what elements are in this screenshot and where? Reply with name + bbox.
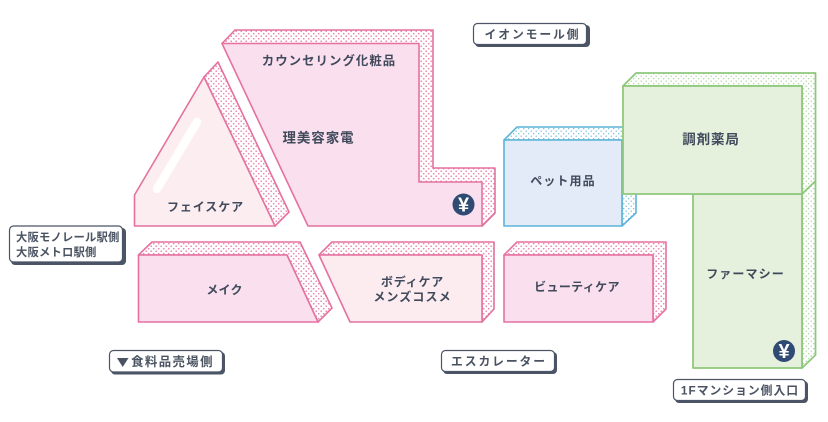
heading: ボディケア メンズコスメ: メンズコスメ [373,289,452,304]
heading: ペット用品: ペット用品 [530,174,596,188]
heading: ファーマシー: ファーマシー [706,267,785,281]
panel: ビューティケア [504,242,666,322]
label: 1Fマンション側入口: 1Fマンション側入口 [681,384,799,398]
label: 大阪モノレール駅側 大阪メトロ駅側: 大阪メトロ駅側 [16,245,96,259]
icon: yen: ¥ [778,341,790,363]
heading: フェイスケア: フェイスケア [167,200,244,214]
icon: yen [773,340,795,363]
label: エスカレーター [442,350,557,374]
heading: メイク: メイク [206,283,243,297]
heading: カウンセリング化粧品: カウンセリング化粧品 [262,53,396,68]
panel: フェイスケア [134,62,289,226]
label: 1Fマンション側入口 [674,380,808,403]
panel: ペット用品 [504,127,636,226]
label: イオンモール側 [474,24,590,47]
heading: 理美容家電: 理美容家電 [282,130,354,146]
heading: ビューティケア: ビューティケア [534,279,620,294]
panel: メイク [138,242,332,322]
panel: ボディケア メンズコスメ [319,242,494,322]
heading: ボディケア メンズコスメ: ボディケア [381,274,444,289]
label: 大阪モノレール駅側 大阪メトロ駅側: 大阪モノレール駅側 [16,230,119,244]
label: ▼食料品売場側: 食料品売場側 [131,354,214,369]
heading: ボディケア メンズコスメ [373,274,452,304]
panel: 調剤薬局 / ファーマシー [623,73,816,368]
label: ▼食料品売場側 [110,350,225,374]
label: 大阪モノレール駅側 大阪メトロ駅側 [10,226,126,265]
label: エスカレーター: エスカレーター [451,354,547,368]
highlight stroke [157,122,197,189]
panel: カウンセリング化粧品 / 理美容家電 [222,30,495,226]
icon: yen: ¥ [458,194,470,216]
label: イオンモール側: イオンモール側 [485,28,580,42]
heading: 調剤薬局: 調剤薬局 [682,132,740,147]
icon: down triangle [117,358,128,367]
icon: yen [452,194,474,216]
